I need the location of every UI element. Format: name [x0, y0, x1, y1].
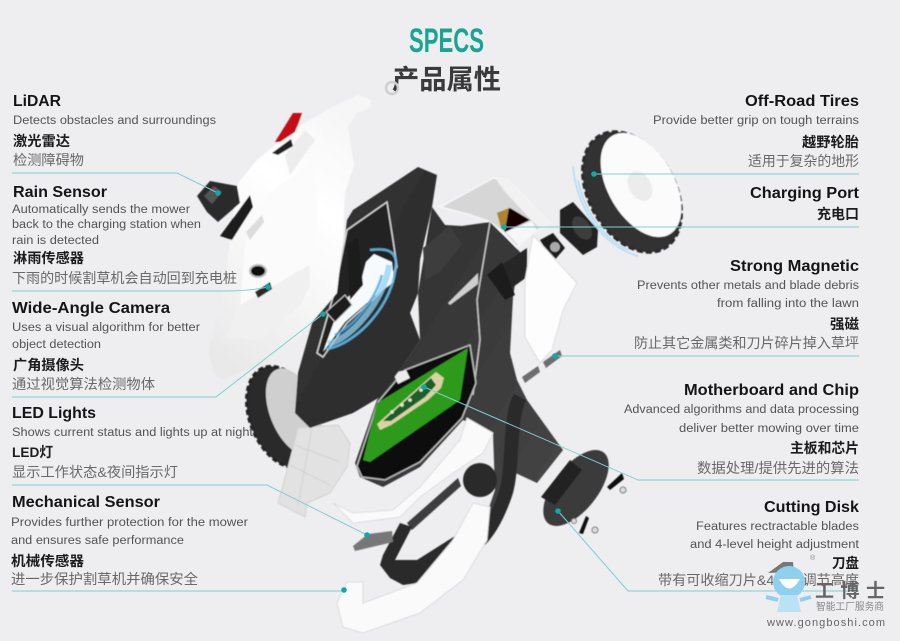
motherboard	[363, 348, 468, 462]
text: Strong Magnetic: 强磁	[830, 316, 859, 332]
brand name: 工博士	[815, 580, 885, 602]
left rear wheel	[233, 355, 333, 479]
text: Rain Sensor: Automatically sends the mower	[12, 204, 190, 216]
leader lines and dots	[12, 171, 859, 593]
text: LED Lights: 显示工作状态&夜间指示灯	[12, 464, 178, 480]
text: Cutting Disk: 带有可收缩刀片&4档可调节高度	[658, 572, 859, 588]
text: Cutting Disk: and 4-level height adjustment	[690, 539, 860, 551]
top black frame	[295, 167, 437, 428]
text: Motherboard and Chip: Advanced algorithms and data processing	[624, 404, 859, 416]
text: LED Lights: Shows current status and lights up at night	[12, 427, 254, 439]
cutting disk	[531, 439, 626, 537]
text: Cutting Disk	[658, 499, 860, 588]
red button	[275, 113, 302, 142]
sphere joint	[463, 463, 497, 497]
blue airflow swirl	[326, 249, 396, 349]
rain sensor module	[255, 282, 272, 298]
text: Cutting Disk: 刀盘	[832, 555, 859, 571]
charging port	[497, 208, 530, 232]
Chinese title: 产品属性	[392, 65, 501, 95]
text: Off-Road Tires: Off-Road Tires	[745, 93, 859, 110]
text: LiDAR: 检测障碍物	[13, 152, 84, 168]
text: Mechanical Sensor: Mechanical Sensor	[12, 494, 160, 511]
rear shell	[440, 178, 550, 247]
text: Mechanical Sensor: Provides further protection for the mower	[11, 517, 248, 529]
mechanical sensor part	[353, 531, 393, 551]
text: Off-Road Tires: 越野轮胎	[802, 134, 859, 150]
text: Mechanical Sensor: and ensures safe performance	[11, 535, 184, 547]
text: Charging Port: Charging Port	[750, 185, 860, 202]
text: LiDAR: 激光雷达	[13, 133, 70, 149]
text: Off-Road Tires: 适用于复杂的地形	[748, 153, 859, 169]
text: Strong Magnetic: from falling into the lawn	[717, 298, 859, 310]
text: Motherboard and Chip: Motherboard and Chip	[684, 382, 859, 399]
camera window	[317, 202, 397, 357]
small ring icon	[386, 82, 398, 94]
text: Mechanical Sensor	[11, 494, 248, 587]
text: Rain Sensor: Rain Sensor	[13, 184, 107, 201]
text: Wide-Angle Camera: Wide-Angle Camera	[12, 300, 170, 317]
text: Charging Port: 充电口	[817, 206, 859, 222]
text: Wide-Angle Camera: 广角摄像头	[13, 357, 84, 373]
text: Cutting Disk: Cutting Disk	[764, 499, 859, 516]
exploded mower illustration	[197, 95, 702, 633]
brand tagline: 智能工厂服务商	[816, 600, 884, 613]
text: Rain Sensor	[12, 184, 237, 286]
text: Strong Magnetic: Prevents other metals and blade debris	[637, 280, 859, 292]
text: Mechanical Sensor: 机械传感器	[11, 553, 84, 569]
text: Rain Sensor: back to the charging station when	[12, 219, 201, 231]
text: LiDAR: Detects obstacles and surroundings	[13, 115, 216, 127]
left wheel fender	[278, 425, 350, 517]
text: Charging Port	[750, 185, 860, 222]
text: LiDAR: LiDAR	[13, 93, 61, 110]
text: Rain Sensor: rain is detected	[12, 235, 99, 247]
SPECS heading: SPECS	[409, 22, 484, 60]
text: LED Lights: LED Lights	[12, 405, 96, 422]
text: Motherboard and Chip	[624, 382, 859, 476]
white side fender	[525, 235, 577, 363]
black bumper liner	[380, 523, 470, 585]
text: Strong Magnetic	[634, 258, 859, 351]
wheel motor	[540, 202, 598, 262]
text: Wide-Angle Camera: 通过视觉算法检测物体	[12, 376, 155, 392]
text: Wide-Angle Camera	[12, 300, 200, 392]
text: Off-Road Tires	[653, 93, 859, 169]
text: Strong Magnetic: Strong Magnetic	[730, 258, 859, 275]
watermark logo	[766, 554, 885, 629]
website: www.gongboshi.com	[766, 617, 885, 629]
sensor strip	[407, 478, 461, 530]
text: Motherboard and Chip: deliver better mowing over time	[679, 423, 859, 435]
text: Motherboard and Chip: 数据处理/提供先进的算法	[697, 460, 859, 476]
LiDAR module	[197, 181, 253, 240]
text: Wide-Angle Camera: Uses a visual algorithm for better	[12, 322, 200, 334]
text: Wide-Angle Camera: object detection	[12, 339, 101, 351]
text: LiDAR	[13, 93, 216, 168]
text: Strong Magnetic: 防止其它金属类和刀片碎片掉入草坪	[634, 335, 859, 351]
rain sensor hole	[250, 265, 266, 277]
text: Mechanical Sensor: 进一步保护割草机并确保安全	[11, 571, 198, 587]
white bumper bracket	[333, 418, 493, 523]
title	[392, 22, 501, 95]
text: Rain Sensor: 淋雨传感器	[13, 250, 84, 266]
drive belt	[480, 397, 520, 540]
watermark logo: ®	[810, 554, 816, 562]
text: Off-Road Tires: Provide better grip on tough terrains	[653, 115, 859, 127]
top white shell	[209, 95, 371, 380]
magnets	[522, 350, 562, 383]
text: Rain Sensor: 下雨的时候割草机会自动回到充电桩	[12, 270, 237, 286]
camera mount	[326, 295, 352, 322]
right wheel	[562, 114, 702, 270]
main chassis body	[355, 207, 563, 540]
text: LED Lights	[12, 405, 254, 480]
front white bumper	[337, 503, 490, 633]
internal pan	[357, 345, 476, 480]
text: Motherboard and Chip: 主板和芯片	[790, 440, 859, 456]
blue motion arcs	[573, 166, 638, 256]
text: LED Lights: LED灯	[12, 444, 53, 460]
mascot icon	[766, 562, 811, 612]
text: Cutting Disk: Features rectractable blades	[696, 521, 859, 533]
